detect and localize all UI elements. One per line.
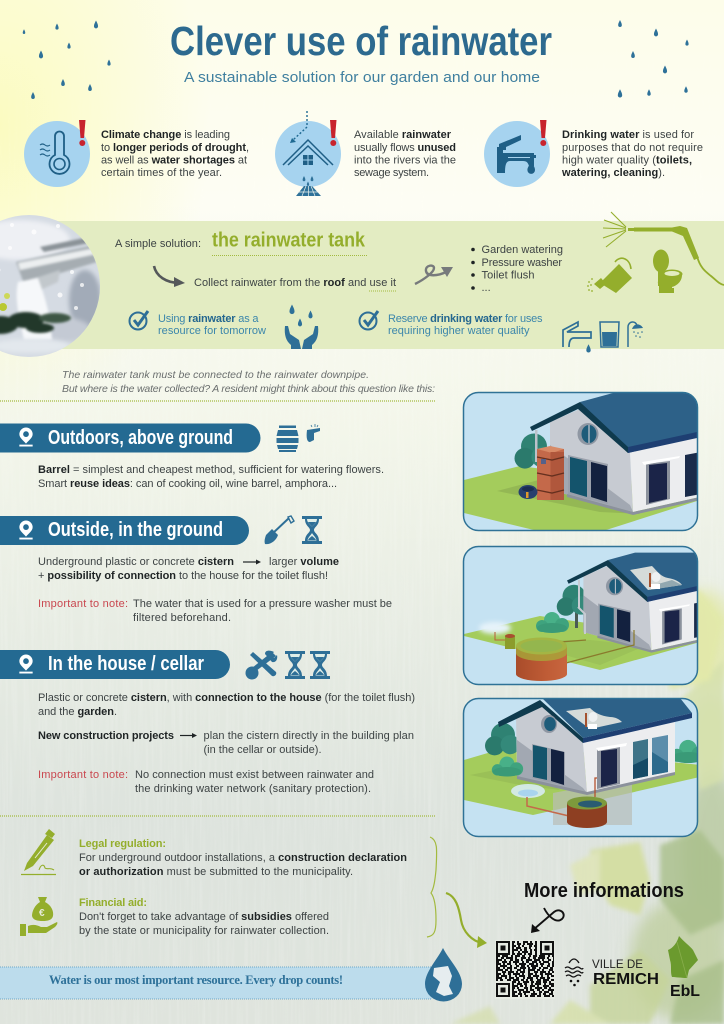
tree — [556, 584, 584, 628]
text: reserve drinking water: requiring higher water quality — [388, 325, 530, 337]
list: uses: Garden watering — [482, 244, 563, 256]
text: legal regulation: Legal regulation: — [79, 838, 166, 850]
panel: the rainwater tank — [0, 212, 724, 357]
text: cistern: larger volume — [269, 556, 339, 568]
photo: rain falling from gutter — [0, 215, 101, 357]
skylight cutaway — [630, 566, 682, 590]
logo: EbL leaf: EbL — [670, 983, 700, 1000]
text: unused rainwater — [354, 129, 456, 179]
text: barrel — [38, 464, 384, 490]
text: new construction: New construction projects — [38, 730, 174, 742]
slogan band — [0, 967, 432, 999]
logo: Ville de Remich: REMICH — [593, 971, 659, 988]
arrow: squiggle — [415, 266, 453, 284]
list: uses: Toilet flush — [482, 270, 534, 282]
note: important: No connection must exist between rainwater and — [135, 769, 374, 781]
text: legal regulation: or authorization must be submitted to the municipality. — [79, 866, 353, 878]
text: resource for tomorrow: resource for tomorrow — [158, 325, 266, 337]
sprinkler — [477, 620, 515, 649]
icon: hands and drops — [285, 304, 318, 349]
text: reserve drinking water: Reserve drinking water for uses — [388, 313, 543, 325]
text: reserve drinking water — [388, 313, 543, 337]
icon: hourglass — [302, 516, 322, 544]
rain barrel — [537, 446, 564, 500]
subtitle: A sustainable solution for our garden and our home — [184, 69, 540, 86]
text: cistern: + possibility of connection to the house for the toilet flush! — [38, 570, 328, 582]
icons: tap, glass and shower — [563, 322, 643, 353]
text: financial aid: Financial aid: — [79, 897, 147, 909]
financial aid — [20, 897, 329, 937]
text: resource for tomorrow: Using rainwater as a — [158, 313, 259, 325]
section 3: in the house / cellar — [0, 650, 415, 795]
cistern — [567, 796, 607, 828]
text: unused rainwater: into the rivers via the — [354, 154, 456, 166]
text: cistern — [38, 556, 339, 582]
note: important: The water that is used for a pressure washer must be — [133, 598, 392, 610]
icon: smart idea hand — [307, 424, 320, 442]
intro question text — [0, 369, 436, 401]
icon: tools — [246, 651, 277, 680]
text: resource for tomorrow — [158, 313, 266, 337]
text: unused rainwater: sewage system. — [354, 167, 429, 179]
bush — [536, 612, 569, 633]
slogan band: Water is our most important resource. Every drop counts! — [49, 973, 343, 987]
arrow: loop — [531, 908, 564, 933]
logo: EbL leaf — [668, 936, 700, 1000]
note: important — [38, 769, 374, 795]
note: important: Important to note: — [38, 598, 128, 610]
text: legal regulation — [79, 838, 407, 878]
note: important: filtered beforehand. — [133, 612, 231, 624]
text: cistern: Underground plastic or concrete cistern — [38, 556, 234, 568]
note: important — [38, 598, 392, 624]
text: legal regulation: For underground outdoor installations, a construction declaration — [79, 852, 407, 864]
text: cistern connection: and the garden. — [38, 706, 117, 718]
text: climate change: Climate change is leading — [101, 129, 230, 141]
note: important: Important to note: — [38, 769, 128, 781]
intro question text: But where is the water collected? A resident might think about this question like this: — [62, 383, 435, 395]
heading banner: Outdoors, above ground — [48, 427, 233, 449]
text: financial aid: Don't forget to take advantage of subsidies offered — [79, 911, 329, 923]
house — [498, 698, 692, 795]
title: Clever use of rainwater — [170, 18, 552, 64]
section 1: outdoors, above ground — [0, 424, 384, 490]
heading banner: Outside, in the ground — [48, 519, 223, 541]
text: climate change: as well as water shortages at — [101, 154, 247, 166]
icon: fountain pen — [21, 829, 56, 874]
list: uses: Pressure washer — [482, 257, 562, 269]
decorative rain drops, right — [618, 20, 689, 98]
text: barrel: Smart reuse ideas: can of cooking oil, wine barrel, amphora... — [38, 478, 337, 490]
icon: watering can — [587, 258, 632, 293]
icon: water drop with country — [425, 948, 462, 1002]
intro question text: The rainwater tank must be connected to the rainwater downpipe. — [62, 369, 369, 381]
brace — [427, 837, 437, 937]
bush — [514, 434, 547, 469]
text: drinking water: purposes that do not require — [562, 142, 703, 154]
legal regulation — [21, 829, 407, 878]
text: unused rainwater: Available rainwater — [354, 129, 452, 141]
problem 2: unused rainwater — [275, 111, 456, 196]
icon: pressure washer — [603, 212, 724, 285]
QR code — [495, 940, 555, 999]
panel: barrel illustration — [464, 392, 720, 531]
heading: the rainwater tank: the rainwater tank — [212, 230, 366, 252]
heading banner: In the house / cellar — [48, 653, 204, 675]
pond — [511, 784, 545, 798]
heading banner — [0, 650, 230, 679]
heading: more informations: More informations — [524, 880, 684, 902]
icon: barrel — [276, 426, 298, 452]
text: climate change: to longer periods of drought, — [101, 142, 249, 154]
icon: money bag and hand — [20, 897, 57, 936]
text: climate change: certain times of the year. — [101, 167, 222, 179]
icon: thermometer — [24, 120, 90, 187]
text: collect rainwater: Collect rainwater from the roof and use it — [194, 277, 396, 289]
logo: Ville de Remich — [565, 959, 659, 988]
panel: cellar cistern illustration — [464, 698, 707, 836]
text: cistern connection — [38, 692, 415, 718]
text: financial aid: by the state or municipality for rainwater collection. — [79, 925, 329, 937]
icon: tap — [484, 120, 550, 187]
check icon 1 — [130, 311, 148, 330]
panel: underground cistern illustration — [464, 546, 723, 684]
list: uses: ... — [482, 282, 491, 294]
icon: toilet — [653, 250, 682, 293]
list: uses — [471, 244, 563, 294]
decorative rain drops, left — [23, 20, 111, 99]
icon: money bag and hand: € — [39, 908, 45, 919]
text: unused rainwater: usually flows unused — [354, 142, 456, 154]
arrow: to more information — [446, 893, 487, 948]
section 2: outside, in the ground — [0, 516, 392, 624]
heading banner — [0, 424, 260, 452]
cistern — [516, 638, 567, 681]
problem 1: climate change — [24, 120, 249, 187]
text: barrel: Barrel = simplest and cheapest method, sufficient for watering flowers. — [38, 464, 384, 476]
icon: hourglass — [285, 651, 305, 679]
text: drinking water: Drinking water is used for — [562, 129, 694, 141]
text: drinking water — [561, 129, 703, 179]
hose — [518, 485, 538, 499]
icon: hourglass — [310, 651, 330, 679]
problem 3: drinking water — [484, 120, 703, 187]
icon: house and rain — [275, 111, 341, 196]
text: financial aid — [79, 897, 329, 937]
note: important: the drinking water network (sanitary protection). — [135, 783, 371, 795]
text: new construction: (in the cellar or outside). — [204, 744, 322, 756]
heading banner — [0, 516, 249, 545]
check icon 2 — [360, 311, 378, 330]
text: cistern connection: Plastic or concrete cistern, with connection to the house (for the toilet flush) — [38, 692, 415, 704]
text: drinking water: high water quality (toilets, — [562, 154, 692, 166]
text: new construction — [38, 730, 414, 756]
text: a simple solution: A simple solution: — [115, 238, 201, 250]
text: new construction: plan the cistern directly in the building plan — [204, 730, 414, 742]
bushes — [485, 723, 520, 755]
text: drinking water: watering, cleaning). — [561, 167, 665, 179]
arrow: curved — [154, 266, 185, 287]
text: climate change — [101, 129, 249, 179]
logo: Ville de Remich: VILLE DE — [592, 959, 643, 971]
cellar ghost — [553, 784, 632, 825]
icon: shovel — [265, 516, 294, 544]
